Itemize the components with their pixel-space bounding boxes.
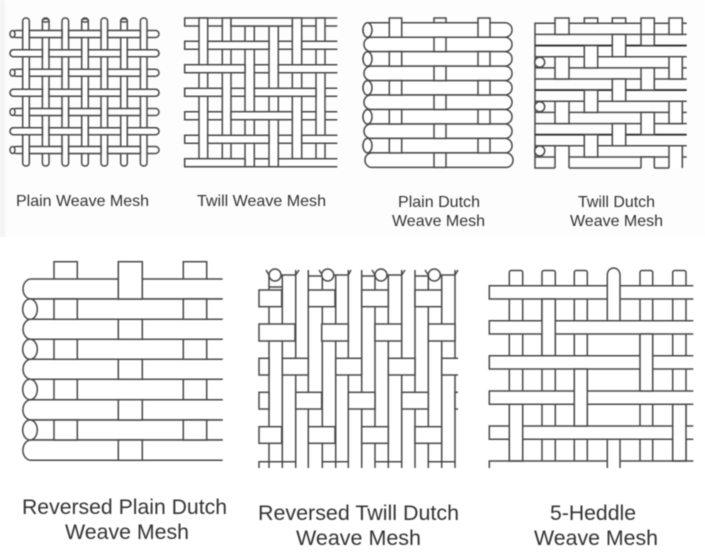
diagram: reversed twill dutch weave (259, 269, 458, 468)
panel: twill weave mesh (185, 18, 337, 210)
label: reversed plain dutch weave mesh: Reversed Plain Dutch (22, 495, 227, 519)
label: 5-heddle weave mesh: Weave Mesh (534, 526, 658, 550)
diagram: twill weave (185, 18, 337, 167)
label: plain dutch weave mesh: Plain Dutch (398, 194, 480, 211)
panel: plain weave mesh (10, 18, 159, 210)
diagram: plain dutch weave (363, 18, 513, 167)
label: reversed plain dutch weave mesh: Weave Mesh (65, 520, 189, 544)
label: plain dutch weave mesh: Weave Mesh (392, 213, 485, 230)
label: 5-heddle weave mesh (534, 501, 658, 550)
diagram: reversed plain dutch weave (23, 262, 223, 460)
label: twill dutch weave mesh: Weave Mesh (570, 213, 663, 230)
label: reversed twill dutch weave mesh (258, 501, 459, 550)
label: reversed twill dutch weave mesh: Reversed Twill Dutch (258, 501, 459, 525)
diagram: twill dutch weave (535, 18, 687, 168)
label: 5-heddle weave mesh: 5-Heddle (550, 501, 636, 525)
diagram: plain weave (10, 18, 159, 166)
label: reversed plain dutch weave mesh (22, 495, 227, 544)
label: twill dutch weave mesh (570, 194, 663, 230)
label: plain dutch weave mesh (392, 194, 485, 230)
panel: twill dutch weave mesh (535, 18, 687, 230)
label: twill dutch weave mesh: Twill Dutch (578, 194, 655, 211)
label: reversed twill dutch weave mesh: Weave Mesh (296, 526, 421, 550)
panel: reversed plain dutch weave mesh (22, 262, 227, 544)
label: twill weave mesh: Twill Weave Mesh (197, 193, 326, 210)
panel: plain dutch weave mesh (363, 18, 513, 230)
diagram: 5-heddle weave (489, 268, 693, 468)
panel: reversed twill dutch weave mesh (258, 269, 459, 550)
panel: 5-heddle weave mesh (489, 268, 693, 550)
label: plain weave mesh: Plain Weave Mesh (16, 193, 149, 210)
